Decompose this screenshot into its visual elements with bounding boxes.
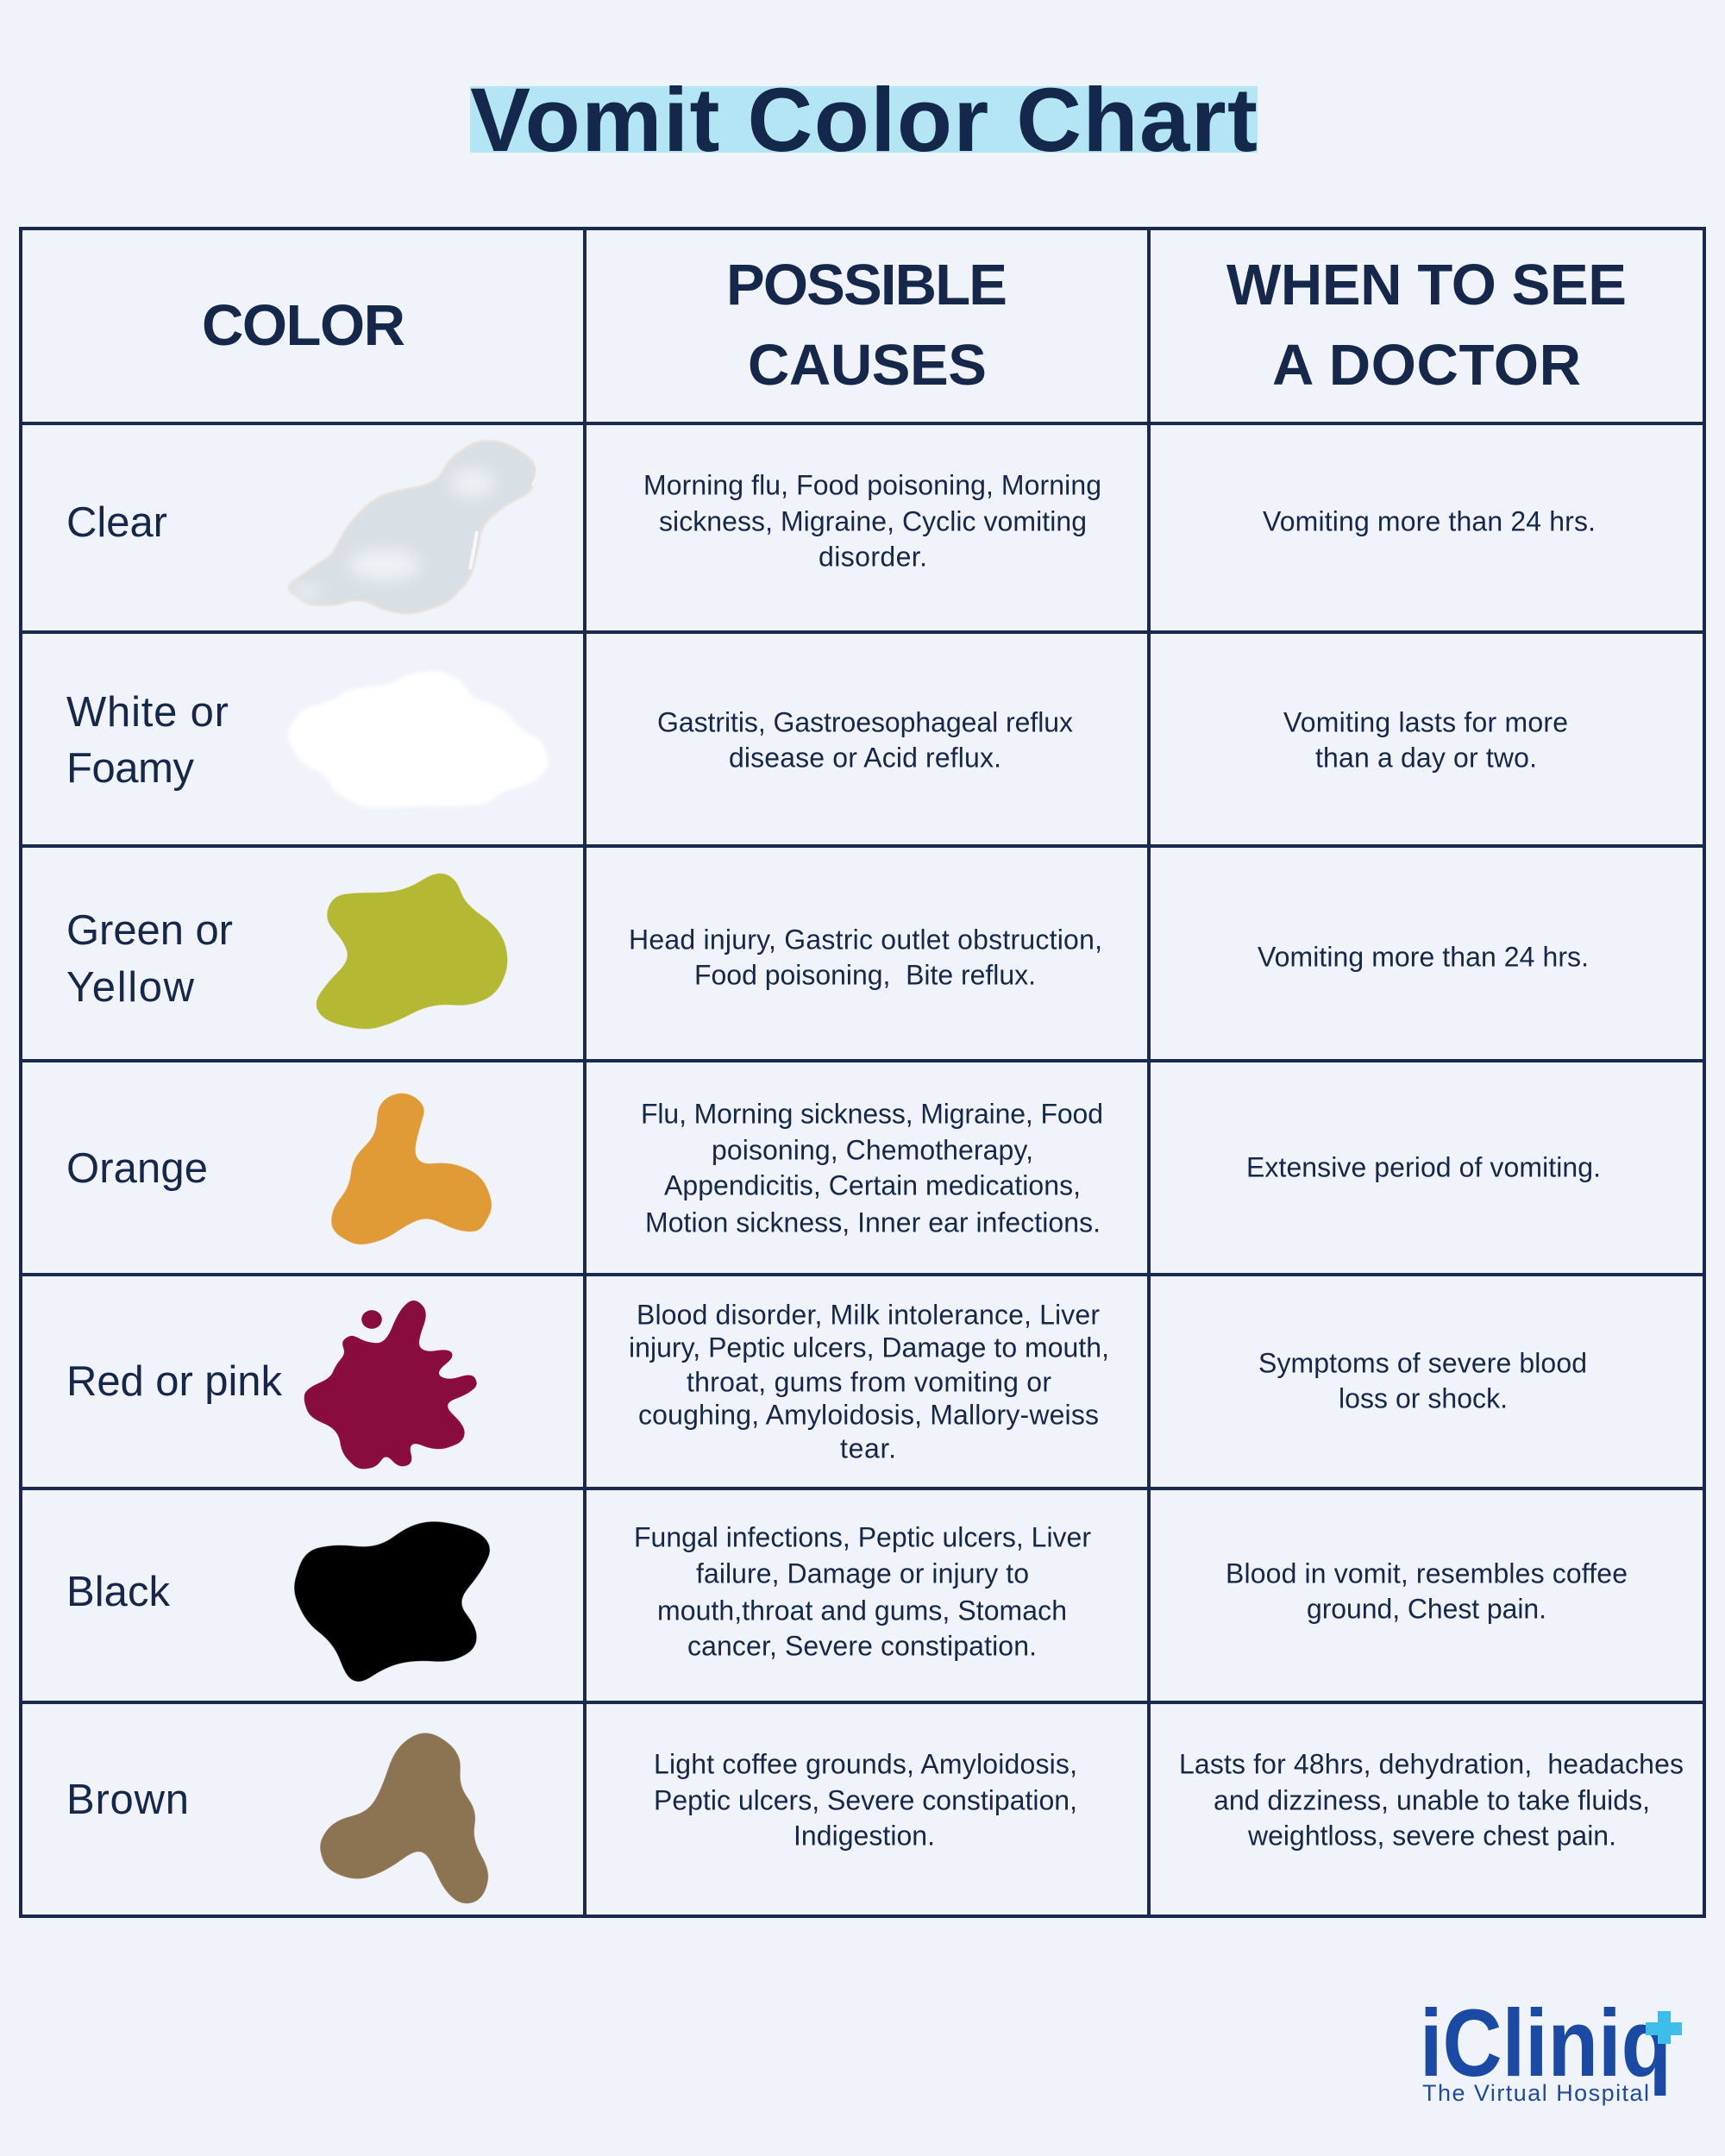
causes: orange: Motion sickness, Inner ear infections.	[645, 1207, 1101, 1238]
icon: brown blob	[320, 1733, 488, 1904]
causes: red or pink: throat, gums from vomiting or	[687, 1366, 1051, 1397]
causes: red or pink: coughing, Amyloidosis, Mallory-weiss	[638, 1399, 1099, 1430]
logo tagline: The Virtual Hospital	[1422, 2080, 1649, 2106]
causes: white or foamy: Gastritis, Gastroesophageal reflux	[657, 707, 1073, 738]
heading: when to see a doctor	[1226, 253, 1627, 398]
icon: red splatter	[304, 1300, 476, 1469]
label: clear: Clear	[66, 499, 167, 546]
doctor advice: clear: Vomiting more than 24 hrs.	[1263, 505, 1596, 536]
causes: black	[634, 1521, 1091, 1661]
causes: clear: sickness, Migraine, Cyclic vomiting	[659, 505, 1087, 536]
causes: clear: Morning flu, Food poisoning, Morning	[643, 469, 1101, 500]
causes: orange: Flu, Morning sickness, Migraine, Food	[641, 1099, 1103, 1130]
doctor advice: brown	[1179, 1749, 1684, 1851]
causes: white or foamy: disease or Acid reflux.	[729, 742, 1001, 773]
doctor advice: brown: Lasts for 48hrs, dehydration, headaches	[1179, 1749, 1684, 1780]
heading: color: COLOR	[202, 293, 405, 358]
causes: orange	[641, 1099, 1103, 1238]
icon: orange blob	[331, 1093, 492, 1244]
label: red or pink: Red or pink	[66, 1358, 283, 1405]
doctor advice: orange: Extensive period of vomiting.	[1246, 1152, 1601, 1183]
causes: black: failure, Damage or injury to	[696, 1557, 1029, 1589]
causes: white or foamy	[657, 707, 1073, 773]
doctor advice: black: Blood in vomit, resembles coffee	[1226, 1557, 1628, 1589]
causes: brown	[654, 1749, 1077, 1851]
causes: red or pink: Blood disorder, Milk intolerance, Liver	[637, 1299, 1100, 1330]
causes: brown: Light coffee grounds, Amyloidosis,	[654, 1749, 1077, 1780]
doctor advice: black: ground, Chest pain.	[1307, 1594, 1546, 1625]
causes: red or pink	[629, 1299, 1109, 1464]
causes: green or yellow: Head injury, Gastric outlet obstruction,	[629, 924, 1102, 956]
causes: green or yellow: Food poisoning, Bite reflux.	[694, 959, 1036, 990]
label: green or yellow: Green or	[66, 907, 233, 954]
label: orange: Orange	[66, 1145, 208, 1192]
label: white or foamy	[66, 689, 229, 792]
doctor advice: black	[1226, 1557, 1628, 1625]
row: brown	[66, 1733, 1684, 1904]
doctor advice: green or yellow: Vomiting more than 24 hrs.	[1258, 942, 1589, 973]
doctor advice: white or foamy	[1283, 707, 1568, 773]
causes: black: mouth,throat and gums, Stomach	[657, 1595, 1067, 1626]
icon: green blob	[316, 873, 508, 1029]
row: white or foamy	[66, 671, 1568, 807]
heading: possible causes	[726, 253, 1007, 398]
row: red or pink	[66, 1299, 1587, 1469]
logo: iCliniq: iCliniq	[1420, 1990, 1672, 2096]
row: orange	[66, 1093, 1601, 1244]
causes: red or pink: injury, Peptic ulcers, Damage to mouth,	[629, 1332, 1109, 1363]
label: black: Black	[66, 1569, 171, 1615]
doctor advice: white or foamy: than a day or two.	[1315, 742, 1537, 773]
doctor advice: white or foamy: Vomiting lasts for more	[1283, 707, 1568, 738]
heading: when to see a doctor: A DOCTOR	[1272, 333, 1581, 398]
doctor advice: red or pink	[1258, 1347, 1587, 1414]
icon: white foam blob	[288, 671, 549, 807]
icon: plus sign	[1646, 2011, 1682, 2044]
label: white or foamy: Foamy	[66, 745, 195, 792]
causes: black: cancer, Severe constipation.	[687, 1630, 1037, 1661]
heading: possible causes: POSSIBLE	[726, 253, 1007, 317]
label: brown: Brown	[66, 1777, 189, 1823]
icon: clear blob	[289, 442, 537, 613]
row: green or yellow	[66, 873, 1589, 1029]
heading: possible causes: CAUSES	[748, 333, 987, 398]
causes: brown: Peptic ulcers, Severe constipation,	[654, 1785, 1077, 1816]
causes: red or pink: tear.	[840, 1433, 896, 1464]
table grid	[21, 229, 1704, 1916]
causes: clear	[643, 469, 1101, 573]
causes: orange: poisoning, Chemotherapy,	[712, 1135, 1033, 1166]
label: white or foamy: White or	[66, 689, 229, 736]
causes: black: Fungal infections, Peptic ulcers, Liver	[634, 1521, 1091, 1552]
label: green or yellow: Yellow	[66, 964, 195, 1011]
table header	[202, 253, 1627, 398]
doctor advice: brown: weightloss, severe chest pain.	[1247, 1820, 1616, 1851]
causes: brown: Indigestion.	[794, 1820, 935, 1851]
row: black	[66, 1521, 1628, 1683]
causes: green or yellow	[629, 924, 1102, 990]
title: Vomit Color Chart	[470, 70, 1258, 171]
icon: black blob	[294, 1521, 490, 1683]
row: clear	[66, 442, 1596, 613]
causes: orange: Appendicitis, Certain medications,	[664, 1169, 1081, 1200]
heading: when to see a doctor: WHEN TO SEE	[1226, 253, 1627, 317]
label: green or yellow	[66, 907, 233, 1011]
doctor advice: red or pink: loss or shock.	[1339, 1383, 1508, 1414]
doctor advice: brown: and dizziness, unable to take fluids,	[1214, 1785, 1650, 1816]
doctor advice: red or pink: Symptoms of severe blood	[1258, 1347, 1587, 1378]
causes: clear: disorder.	[819, 542, 927, 573]
